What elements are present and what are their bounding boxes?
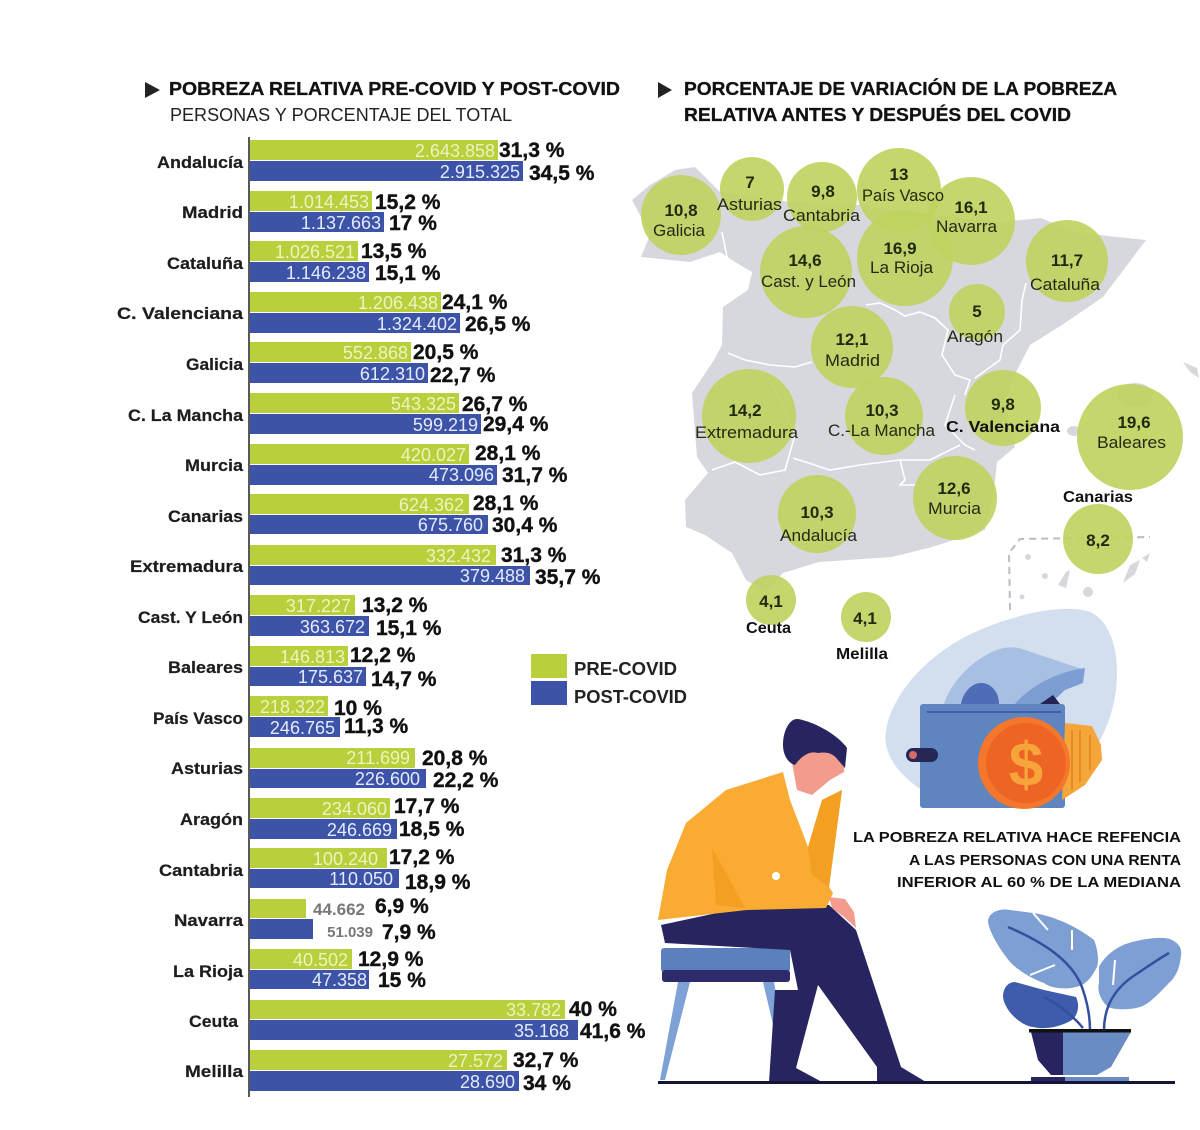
row: Cantabria [159,846,471,894]
bubble: Extremadura: Extremadura [695,423,799,442]
hand on knee [829,897,856,928]
shirt [790,778,825,847]
bubble: Asturias [717,157,784,221]
row: C. Valenciana [117,291,531,336]
row: Murcia: Murcia [185,456,244,475]
bubble: Cataluña: 11,7 [1051,251,1083,270]
legend [531,654,687,707]
row: C. Valenciana: 24,1 % [442,291,508,314]
bubble: Navarra: 16,1 [954,198,988,217]
row: Extremadura: 35,7 % [535,566,601,589]
row: C. Valenciana: 1.206.438 [358,293,438,313]
row: C. La Mancha: C. La Mancha [128,406,244,425]
row: Cataluña: 1.026.521 [275,242,355,262]
row: Melilla: 32,7 % [513,1049,579,1072]
row: Asturias: 211.699 [346,748,410,768]
bubble: C. Valenciana [946,370,1060,446]
row: Aragón: 18,5 % [399,818,465,841]
row: Extremadura: Extremadura [130,557,244,576]
row: Madrid: 1.137.663 [301,213,381,233]
bubble: Murcia [913,456,997,540]
bubble: Galicia: 10,8 [664,201,698,220]
row: Baleares: 12,2 % [350,644,416,667]
row: Cast. Y León: 363.672 [300,617,365,637]
row: Canarias: 624.362 [399,495,464,515]
legend: PRE-COVID [574,659,677,679]
row: Navarra [174,895,436,944]
row: Ceuta: 33.782 [506,1000,561,1020]
bubble: Galicia [641,175,721,255]
row: Andalucía: 2.915.325 [440,162,520,182]
row: Ceuta [189,998,646,1043]
row: Cantabria: 100.240 [313,849,378,869]
row: Canarias: 30,4 % [492,514,558,537]
bubble: Aragón [947,284,1005,346]
bubble: La Rioja: La Rioja [870,258,934,277]
row: Cataluña: 13,5 % [361,240,427,263]
row: Madrid: 17 % [389,212,437,235]
heading: map title: PORCENTAJE DE VARIACIÓN DE LA POBREZA [684,78,1117,99]
heading: map title: RELATIVA ANTES Y DESPUÉS DEL COVID [684,104,1071,125]
bubble: Melilla: Melilla [836,646,888,663]
bubble: Baleares: 19,6 [1117,413,1151,432]
row: Galicia [186,341,496,387]
illustration: wallet and coins [885,609,1117,809]
face and hand [790,742,846,795]
row: Andalucía [157,139,595,185]
row: La Rioja: 15 % [378,969,426,992]
row: Baleares [168,644,437,691]
row: Aragón: Aragón [180,810,243,829]
bubble: Cantabria: 9,8 [811,182,835,201]
bubble: Castilla-La Mancha: C.-La Mancha [828,421,936,440]
caption: definition of relative poverty: INFERIOR AL 60 % DE LA MEDIANA [897,874,1181,891]
row: Cast. Y León: Cast. Y León [138,608,243,627]
bubble: Murcia: Murcia [928,499,982,518]
row: La Rioja [173,948,426,992]
bubble: Extremadura [695,369,799,463]
bubble: Castilla-La Mancha: 10,3 [865,401,899,420]
row: Murcia: 31,7 % [502,464,568,487]
bubble: C. Valenciana: C. Valenciana [946,419,1060,436]
row: La Rioja: 12,9 % [358,948,424,971]
bubble: Baleares: Baleares [1097,433,1166,452]
row: Cast. Y León: 15,1 % [376,617,442,640]
row: Melilla: Melilla [185,1062,244,1081]
row: Cataluña [167,240,441,285]
row: Madrid [182,191,441,235]
map: Balearic islands [1067,362,1199,436]
bubble: Galicia: Galicia [653,221,706,240]
row: Canarias: 675.760 [418,515,483,535]
bubble: Aragón: 5 [972,302,982,321]
row: Extremadura: 379.488 [460,566,525,586]
row: Murcia: 473.096 [429,465,494,485]
row: Cast. Y León: 13,2 % [362,594,428,617]
row: Aragón [180,795,465,841]
heading: map title [658,78,1117,125]
row: C. Valenciana: 26,5 % [465,313,531,336]
illustration: seated man [658,719,926,1082]
bubble: Melilla [836,592,891,663]
row: Navarra: 7,9 % [382,921,436,944]
row: Asturias: 22,2 % [433,769,499,792]
row: Extremadura: 31,3 % [501,544,567,567]
heading: bar chart title: PERSONAS Y PORCENTAJE DEL TOTAL [170,105,512,125]
bubble: Extremadura: 14,2 [728,401,762,420]
row: Galicia: 22,7 % [430,364,496,387]
row: País Vasco [153,696,409,738]
row: Cast. Y León [138,594,442,640]
row: Navarra: 44.662 [313,900,365,919]
bubble: Aragón: Aragón [947,327,1003,346]
bubble: Melilla: 4,1 [853,609,877,628]
row: Asturias: 20,8 % [422,747,488,770]
row: Navarra: 51.039 [327,924,373,941]
bubble: País Vasco: 13 [890,165,908,184]
row: Andalucía: 34,5 % [529,162,595,185]
row: Murcia [185,442,568,487]
bubble: Andalucía [778,475,858,553]
bubble: Andalucía: Andalucía [780,526,858,545]
row: Cantabria: 110.050 [329,869,393,889]
row: País Vasco: 218.322 [260,697,325,717]
heading: bar chart title: POBREZA RELATIVA PRE-COVID Y POST-COVID [169,79,620,99]
bubble: Castilla y León: 14,6 [788,251,822,270]
row: Asturias: Asturias [171,759,243,778]
row: C. La Mancha: 29,4 % [483,413,549,436]
row: Murcia: 420.027 [401,445,466,465]
row: Cataluña: Cataluña [167,254,244,273]
bubble: Madrid [811,306,893,388]
row: Andalucía: 2.643.858 [415,141,495,161]
bubble: Canarias: Canarias [1063,489,1133,506]
caption: definition of relative poverty [853,829,1181,891]
caption: definition of relative poverty: A LAS PERSONAS CON UNA RENTA [909,852,1181,869]
row: Melilla: 28.690 [460,1072,515,1092]
map bubbles: variation by region [641,148,1183,663]
map: region borders [712,232,1026,485]
stool [660,948,791,1080]
row: Galicia: 612.310 [360,364,425,384]
row: C. La Mancha: 543.325 [391,394,456,414]
bubble: Madrid: 12,1 [835,330,869,349]
row: Madrid: Madrid [182,203,243,222]
bubble: Ceuta [746,575,796,637]
bubble: Murcia: 12,6 [937,479,971,498]
row: Canarias [168,492,558,537]
row: Andalucía: Andalucía [157,153,244,172]
bubble: Cataluña: Cataluña [1030,275,1101,294]
row: C. La Mancha [128,393,549,436]
bubble: Andalucía: 10,3 [800,503,834,522]
row: Melilla: 34 % [523,1072,571,1095]
row: Melilla: 27.572 [448,1051,503,1071]
row: País Vasco: 246.765 [270,718,335,738]
bubble: Cantabria: Cantabria [783,206,861,225]
heading: bar chart title [145,79,620,125]
row: Baleares: 146.813 [280,647,345,667]
bubble: Navarra [927,177,1015,265]
row: Cantabria: Cantabria [159,861,244,880]
row: Aragón: 234.060 [322,799,387,819]
row: Ceuta: 41,6 % [580,1020,646,1043]
row: País Vasco: País Vasco [153,709,243,728]
bubble: Ceuta: 4,1 [759,592,783,611]
trousers [661,905,926,1082]
bubble: País Vasco [857,148,944,232]
bubble: Baleares [1077,384,1183,490]
row: Navarra: 6,9 % [375,895,429,918]
row: Ceuta: Ceuta [189,1012,239,1031]
row: Galicia: 552.868 [343,343,408,363]
bubble: País Vasco: País Vasco [862,186,944,205]
row: Baleares: 175.637 [298,667,363,687]
bubble: Canarias [1063,489,1133,574]
illustration: wallet and coins: $ [1009,731,1043,800]
row: Andalucía: 31,3 % [499,139,565,162]
row: La Rioja: 47.358 [312,970,367,990]
bubble: C. Valenciana: 9,8 [991,395,1015,414]
ground line [658,1081,1175,1084]
row: Extremadura: 332.432 [426,546,491,566]
row: Baleares: Baleares [168,658,243,677]
row: Extremadura [130,544,601,589]
bubble: Asturias: 7 [745,173,755,192]
row: Cast. Y León: 317.227 [286,596,351,616]
row: Melilla [185,1049,579,1095]
bubble: Castilla y León: Cast. y León [761,272,856,291]
bubble: Castilla-La Mancha [828,377,936,455]
row: Galicia: 20,5 % [413,341,479,364]
row: Galicia: Galicia [186,355,244,374]
row: Asturias: 226.600 [355,769,420,789]
bubble: Asturias: Asturias [717,195,782,214]
row: Murcia: 28,1 % [475,442,541,465]
row: Cataluña: 1.146.238 [286,263,366,283]
row: Cantabria: 18,9 % [405,871,471,894]
bubble: Castilla y León [760,226,856,318]
row: País Vasco: 11,3 % [344,715,409,738]
bubble: Cantabria [783,162,861,232]
bubble: Navarra: Navarra [936,217,998,236]
bubble: La Rioja: 16,9 [883,239,917,258]
row: La Rioja: 40.502 [293,950,348,970]
row: Cantabria: 17,2 % [389,846,455,869]
bubble: Madrid: Madrid [825,351,880,370]
row: C. La Mancha: 599.219 [413,415,478,435]
map: Spain silhouette [632,167,1199,610]
bubble: Canarias: 8,2 [1086,531,1110,550]
row: C. La Mancha: 26,7 % [462,393,528,416]
row: Madrid: 15,2 % [375,191,441,214]
row: Canarias: 28,1 % [473,492,539,515]
row: La Rioja: La Rioja [173,962,244,981]
bubble: La Rioja [857,210,953,306]
row: Aragón: 246.669 [327,820,392,840]
sweater [658,772,842,920]
row: Asturias [171,747,499,792]
illustration: potted plant [988,910,1181,1082]
row: Cataluña: 15,1 % [375,262,441,285]
caption: definition of relative poverty: LA POBREZA RELATIVA HACE REFENCIA [853,829,1181,846]
bar chart: relative poverty by region [117,137,646,1097]
row: C. Valenciana: 1.324.402 [377,314,457,334]
row: Ceuta: 40 % [569,998,617,1021]
row: Aragón: 17,7 % [394,795,460,818]
row: Ceuta: 35.168 [514,1021,569,1041]
row: Navarra: Navarra [174,911,244,930]
row: Canarias: Canarias [168,507,243,526]
legend: POST-COVID [574,687,687,707]
row: C. Valenciana: C. Valenciana [117,304,244,323]
bubble: Ceuta: Ceuta [746,620,791,637]
row: País Vasco: 10 % [334,697,382,720]
map: Canary Islands inset [1009,537,1150,610]
bubble: Cataluña [1026,220,1108,302]
row: Baleares: 14,7 % [371,668,437,691]
hair [783,719,847,768]
row: Madrid: 1.014.453 [289,192,369,212]
